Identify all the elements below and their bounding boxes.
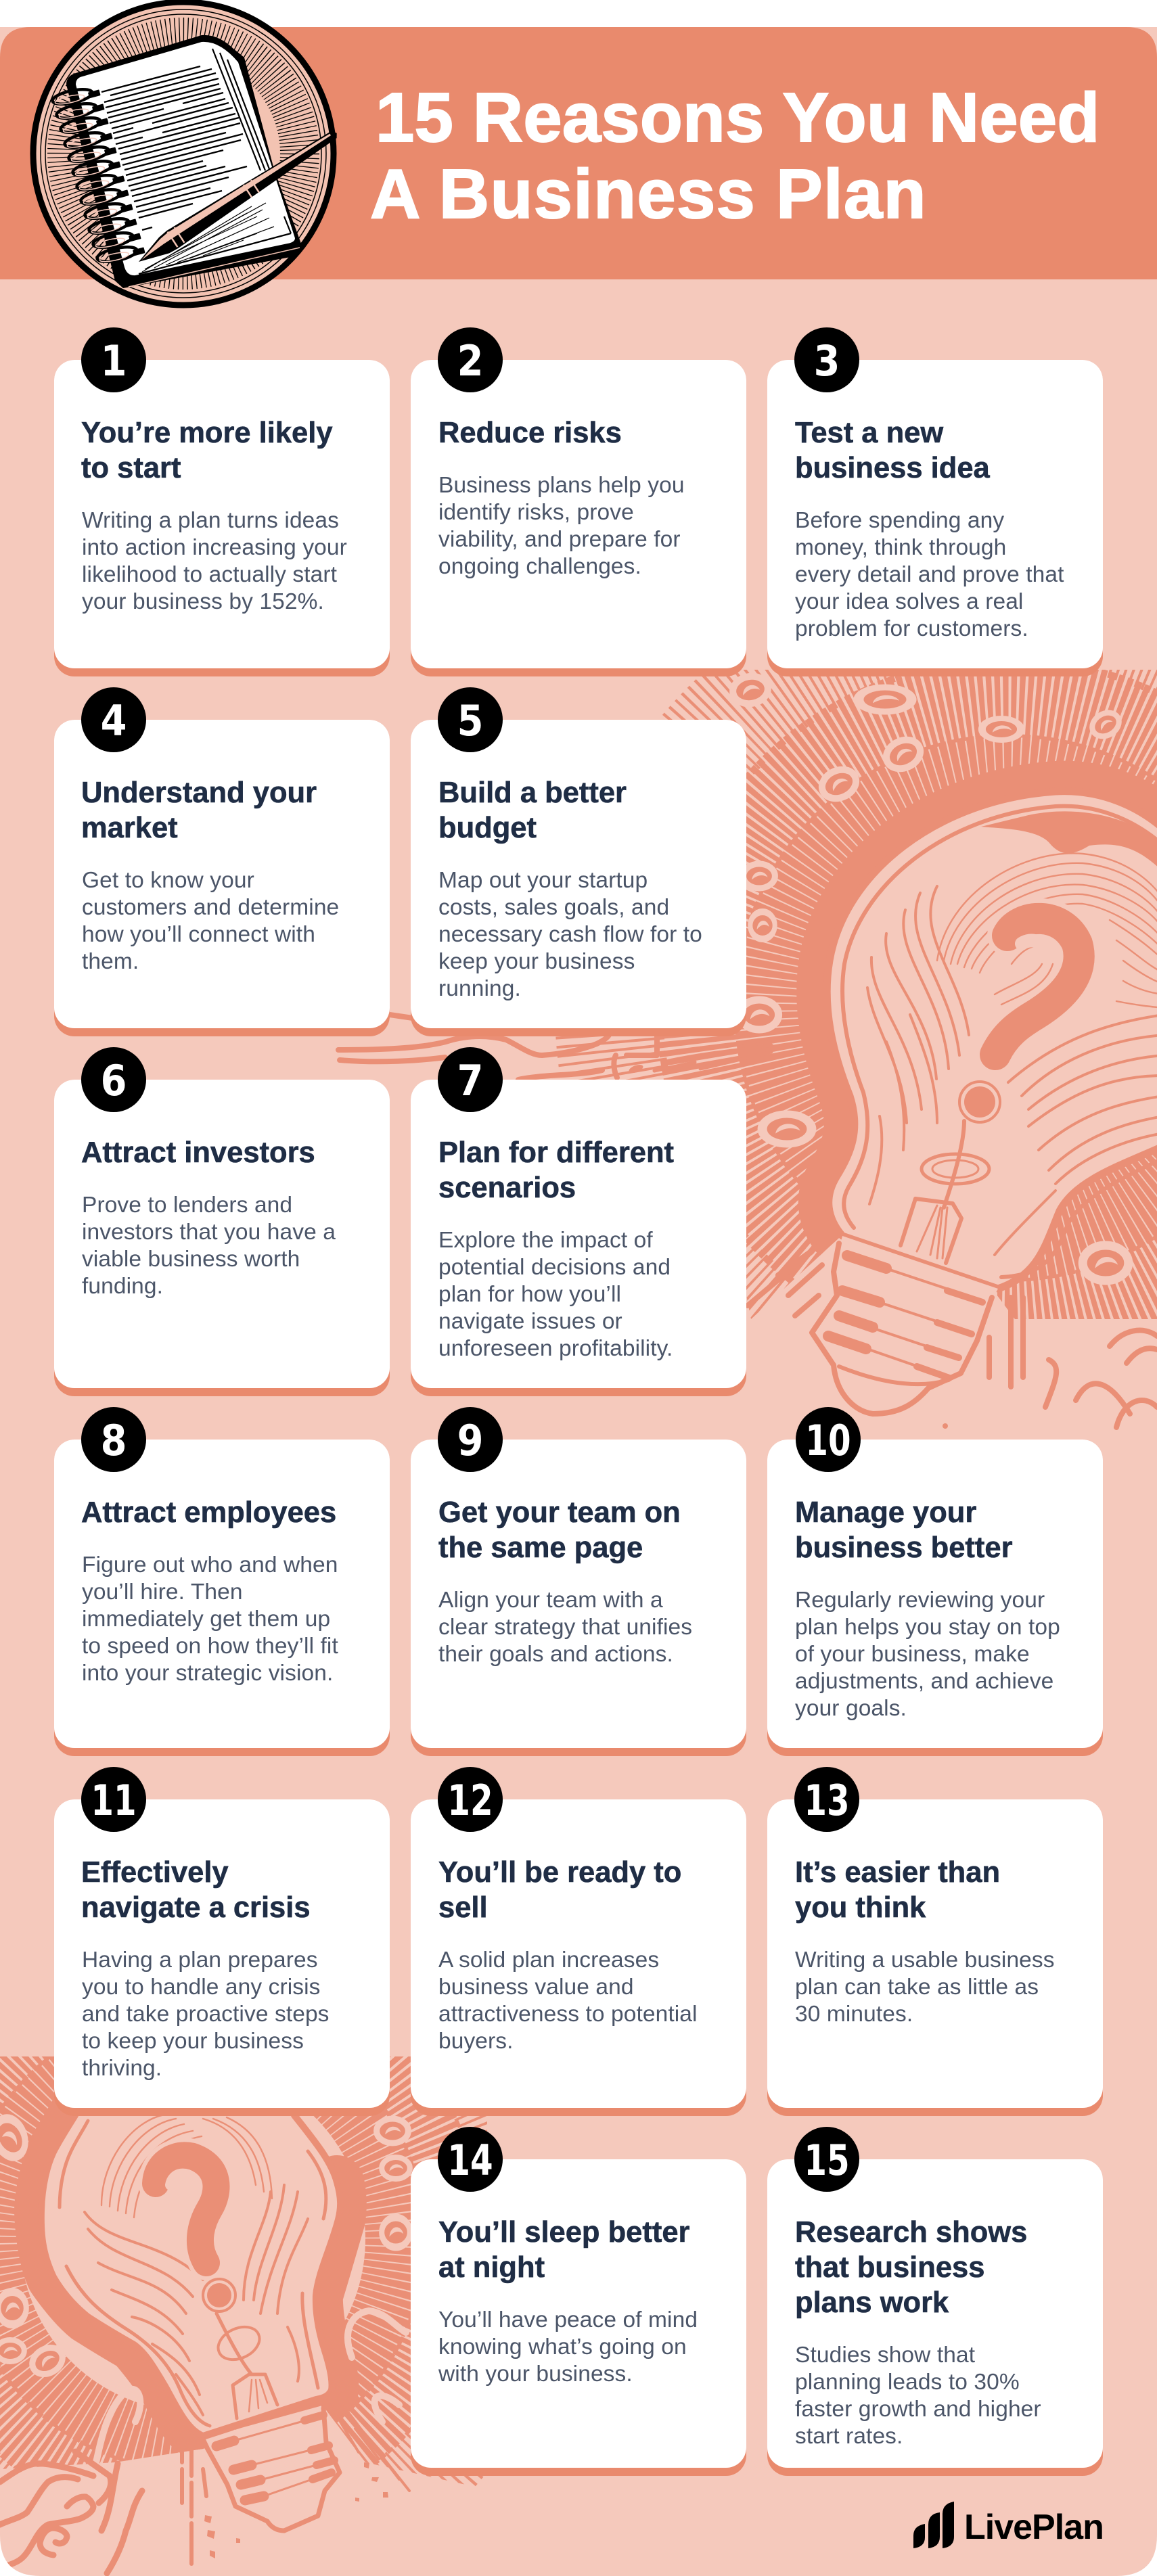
card 8: to speed on how they’ll fit — [82, 1634, 338, 1659]
card 5: costs, sales goals, and — [438, 895, 669, 920]
card 11: Having a plan prepares — [82, 1948, 318, 1973]
card 1 — [54, 327, 390, 676]
card 8: into your strategic vision. — [82, 1661, 333, 1686]
bulb rays — [555, 670, 1157, 1319]
card 12: business value and — [438, 1975, 634, 2000]
bulb screw base — [203, 2402, 340, 2531]
card 6: 6 — [101, 1056, 127, 1105]
card 15: 15 — [804, 2136, 850, 2186]
card 7: scenarios — [438, 1172, 576, 1204]
card 15: faster growth and higher — [795, 2397, 1041, 2422]
card 9 — [411, 1407, 746, 1756]
card 8 — [54, 1407, 390, 1756]
card 8: 8 — [101, 1416, 127, 1465]
title — [370, 78, 1099, 233]
card 10 — [767, 1407, 1103, 1756]
card 10: Regularly reviewing your — [795, 1588, 1045, 1613]
title: 15 Reasons You Need — [376, 78, 1099, 156]
card 5: Map out your startup — [438, 868, 648, 893]
card 10: plan helps you stay on top — [795, 1615, 1060, 1640]
card 11 — [54, 1767, 390, 2116]
card 13: It’s easier than — [795, 1856, 1000, 1889]
card 6: viable business worth — [82, 1247, 300, 1272]
card 14: at night — [438, 2251, 545, 2284]
bulb glass — [827, 791, 1157, 1289]
card 13: Writing a usable business — [795, 1948, 1055, 1973]
card 9: Get your team on — [438, 1496, 681, 1529]
card 4: how you’ll connect with — [82, 922, 315, 947]
card 9: their goals and actions. — [438, 1642, 673, 1667]
card 2: identify risks, prove — [438, 500, 634, 525]
LivePlan logo — [913, 2502, 1104, 2548]
card 6: funding. — [82, 1274, 163, 1299]
card 6: Attract investors — [81, 1136, 315, 1169]
card 8: immediately get them up — [82, 1607, 330, 1632]
card 3: your idea solves a real — [795, 589, 1023, 614]
swirl ornaments — [731, 674, 1157, 1429]
card 1: into action increasing your — [82, 535, 347, 560]
card 7: Plan for different — [438, 1136, 674, 1169]
card 2: viability, and prepare for — [438, 527, 681, 552]
card 12: sell — [438, 1891, 488, 1924]
card 5: running. — [438, 976, 521, 1001]
card 1: your business by 152%. — [82, 589, 324, 614]
card 9: clear strategy that unifies — [438, 1615, 692, 1640]
card 1: to start — [81, 452, 181, 484]
card 7: Explore the impact of — [438, 1228, 653, 1253]
card 7: unforeseen profitability. — [438, 1336, 673, 1361]
card 14: 14 — [447, 2136, 493, 2186]
card 6: investors that you have a — [82, 1220, 336, 1245]
bulb glass — [41, 2063, 340, 2436]
card 3: 3 — [814, 336, 840, 386]
card 8: Figure out who and when — [82, 1552, 338, 1578]
card 11: Effectively — [81, 1856, 229, 1889]
filament — [901, 1121, 989, 1263]
card 12: buyers. — [438, 2029, 514, 2054]
card 15: start rates. — [795, 2424, 903, 2449]
card 1: 1 — [101, 336, 127, 386]
card 5: 5 — [457, 696, 483, 745]
card 2: 2 — [457, 336, 483, 386]
card 3: business idea — [795, 452, 991, 484]
icon: notebook and pen medallion — [33, 2, 342, 305]
card 1: likelihood to actually start — [82, 562, 338, 587]
card 8: Attract employees — [81, 1496, 336, 1529]
card 2: Reduce risks — [438, 417, 622, 449]
card 15 — [767, 2127, 1103, 2476]
card 4 — [54, 687, 390, 1036]
card 3 — [767, 327, 1103, 676]
card 4: market — [81, 812, 178, 844]
card 5: keep your business — [438, 949, 635, 974]
card 3: every detail and prove that — [795, 562, 1064, 587]
card 12: 12 — [447, 1776, 493, 1826]
card 14: You’ll have peace of mind — [438, 2307, 698, 2332]
LivePlan logo: LivePlan — [964, 2508, 1104, 2547]
card 11: you to handle any crisis — [82, 1975, 320, 2000]
card 14: with your business. — [438, 2362, 633, 2387]
card 10: business better — [795, 1532, 1013, 1564]
card 11: navigate a crisis — [81, 1891, 311, 1924]
card 10: of your business, make — [795, 1642, 1030, 1667]
card 15: plans work — [795, 2286, 949, 2319]
question mark — [156, 2155, 235, 2312]
card 12: attractiveness to potential — [438, 2002, 698, 2027]
card 9: Align your team with a — [438, 1588, 663, 1613]
spiral binding — [51, 87, 145, 264]
header band — [0, 27, 1157, 279]
illustration: upper light bulb with question mark — [338, 609, 1157, 1429]
bulb screw base — [810, 1236, 998, 1414]
card 11: thriving. — [82, 2056, 162, 2081]
card 10: Manage your — [795, 1496, 976, 1529]
card 4: Get to know your — [82, 868, 254, 893]
illustration: lower light bulb with question mark — [0, 1908, 524, 2573]
card 13: plan can take as little as — [795, 1975, 1039, 2000]
card 15: planning leads to 30% — [795, 2370, 1020, 2395]
card 5 — [411, 687, 746, 1036]
card 15: Research shows — [795, 2216, 1027, 2249]
card 9: 9 — [457, 1416, 483, 1465]
card 7: navigate issues or — [438, 1309, 622, 1334]
card 8: you’ll hire. Then — [82, 1580, 243, 1605]
card 15: that business — [795, 2251, 984, 2284]
card 5: necessary cash flow for to — [438, 922, 702, 947]
card 6: Prove to lenders and — [82, 1193, 292, 1218]
card 4: Understand your — [81, 777, 317, 809]
pen — [133, 124, 342, 271]
card 2: ongoing challenges. — [438, 554, 641, 579]
card 10: adjustments, and achieve — [795, 1669, 1053, 1694]
card 7 — [411, 1047, 746, 1396]
question mark — [959, 919, 1079, 1122]
card 13: you think — [795, 1891, 926, 1924]
card 14: knowing what’s going on — [438, 2334, 687, 2360]
card 1: You’re more likely — [81, 417, 333, 449]
card 11: to keep your business — [82, 2029, 304, 2054]
card 14 — [411, 2127, 746, 2476]
card 6 — [54, 1047, 390, 1396]
card 7: potential decisions and — [438, 1255, 671, 1280]
card 9: the same page — [438, 1532, 643, 1564]
swirl ornaments — [0, 2111, 410, 2573]
card 3: Test a new — [795, 417, 943, 449]
card 10: 10 — [805, 1417, 851, 1466]
card 11: and take proactive steps — [82, 2002, 330, 2027]
notebook — [66, 35, 301, 288]
card 3: Before spending any — [795, 508, 1004, 533]
title: A Business Plan — [370, 155, 927, 233]
card 4: customers and determine — [82, 895, 339, 920]
card 3: money, think through — [795, 535, 1006, 560]
card 5: Build a better — [438, 777, 627, 809]
card 7: plan for how you’ll — [438, 1282, 621, 1307]
card 13 — [767, 1767, 1103, 2116]
card 4: them. — [82, 949, 139, 974]
card 12: You’ll be ready to — [438, 1856, 681, 1889]
card 4: 4 — [101, 696, 127, 745]
filament — [213, 2314, 277, 2418]
card 2: Business plans help you — [438, 473, 685, 498]
card 15: Studies show that — [795, 2343, 976, 2368]
medallion — [33, 2, 334, 305]
card 12 — [411, 1767, 746, 2116]
card 13: 13 — [804, 1776, 850, 1826]
card 3: problem for customers. — [795, 616, 1028, 641]
card 13: 30 minutes. — [795, 2002, 913, 2027]
card 1: Writing a plan turns ideas — [82, 508, 339, 533]
card 2 — [411, 327, 746, 676]
card 10: your goals. — [795, 1696, 907, 1721]
card 12: A solid plan increases — [438, 1948, 659, 1973]
card 14: You’ll sleep better — [438, 2216, 690, 2249]
card 11: 11 — [91, 1776, 137, 1826]
card 5: budget — [438, 812, 537, 844]
card 7: 7 — [457, 1056, 483, 1105]
bulb rays — [0, 1908, 524, 2571]
squiggles in the card gaps — [338, 1015, 771, 1080]
